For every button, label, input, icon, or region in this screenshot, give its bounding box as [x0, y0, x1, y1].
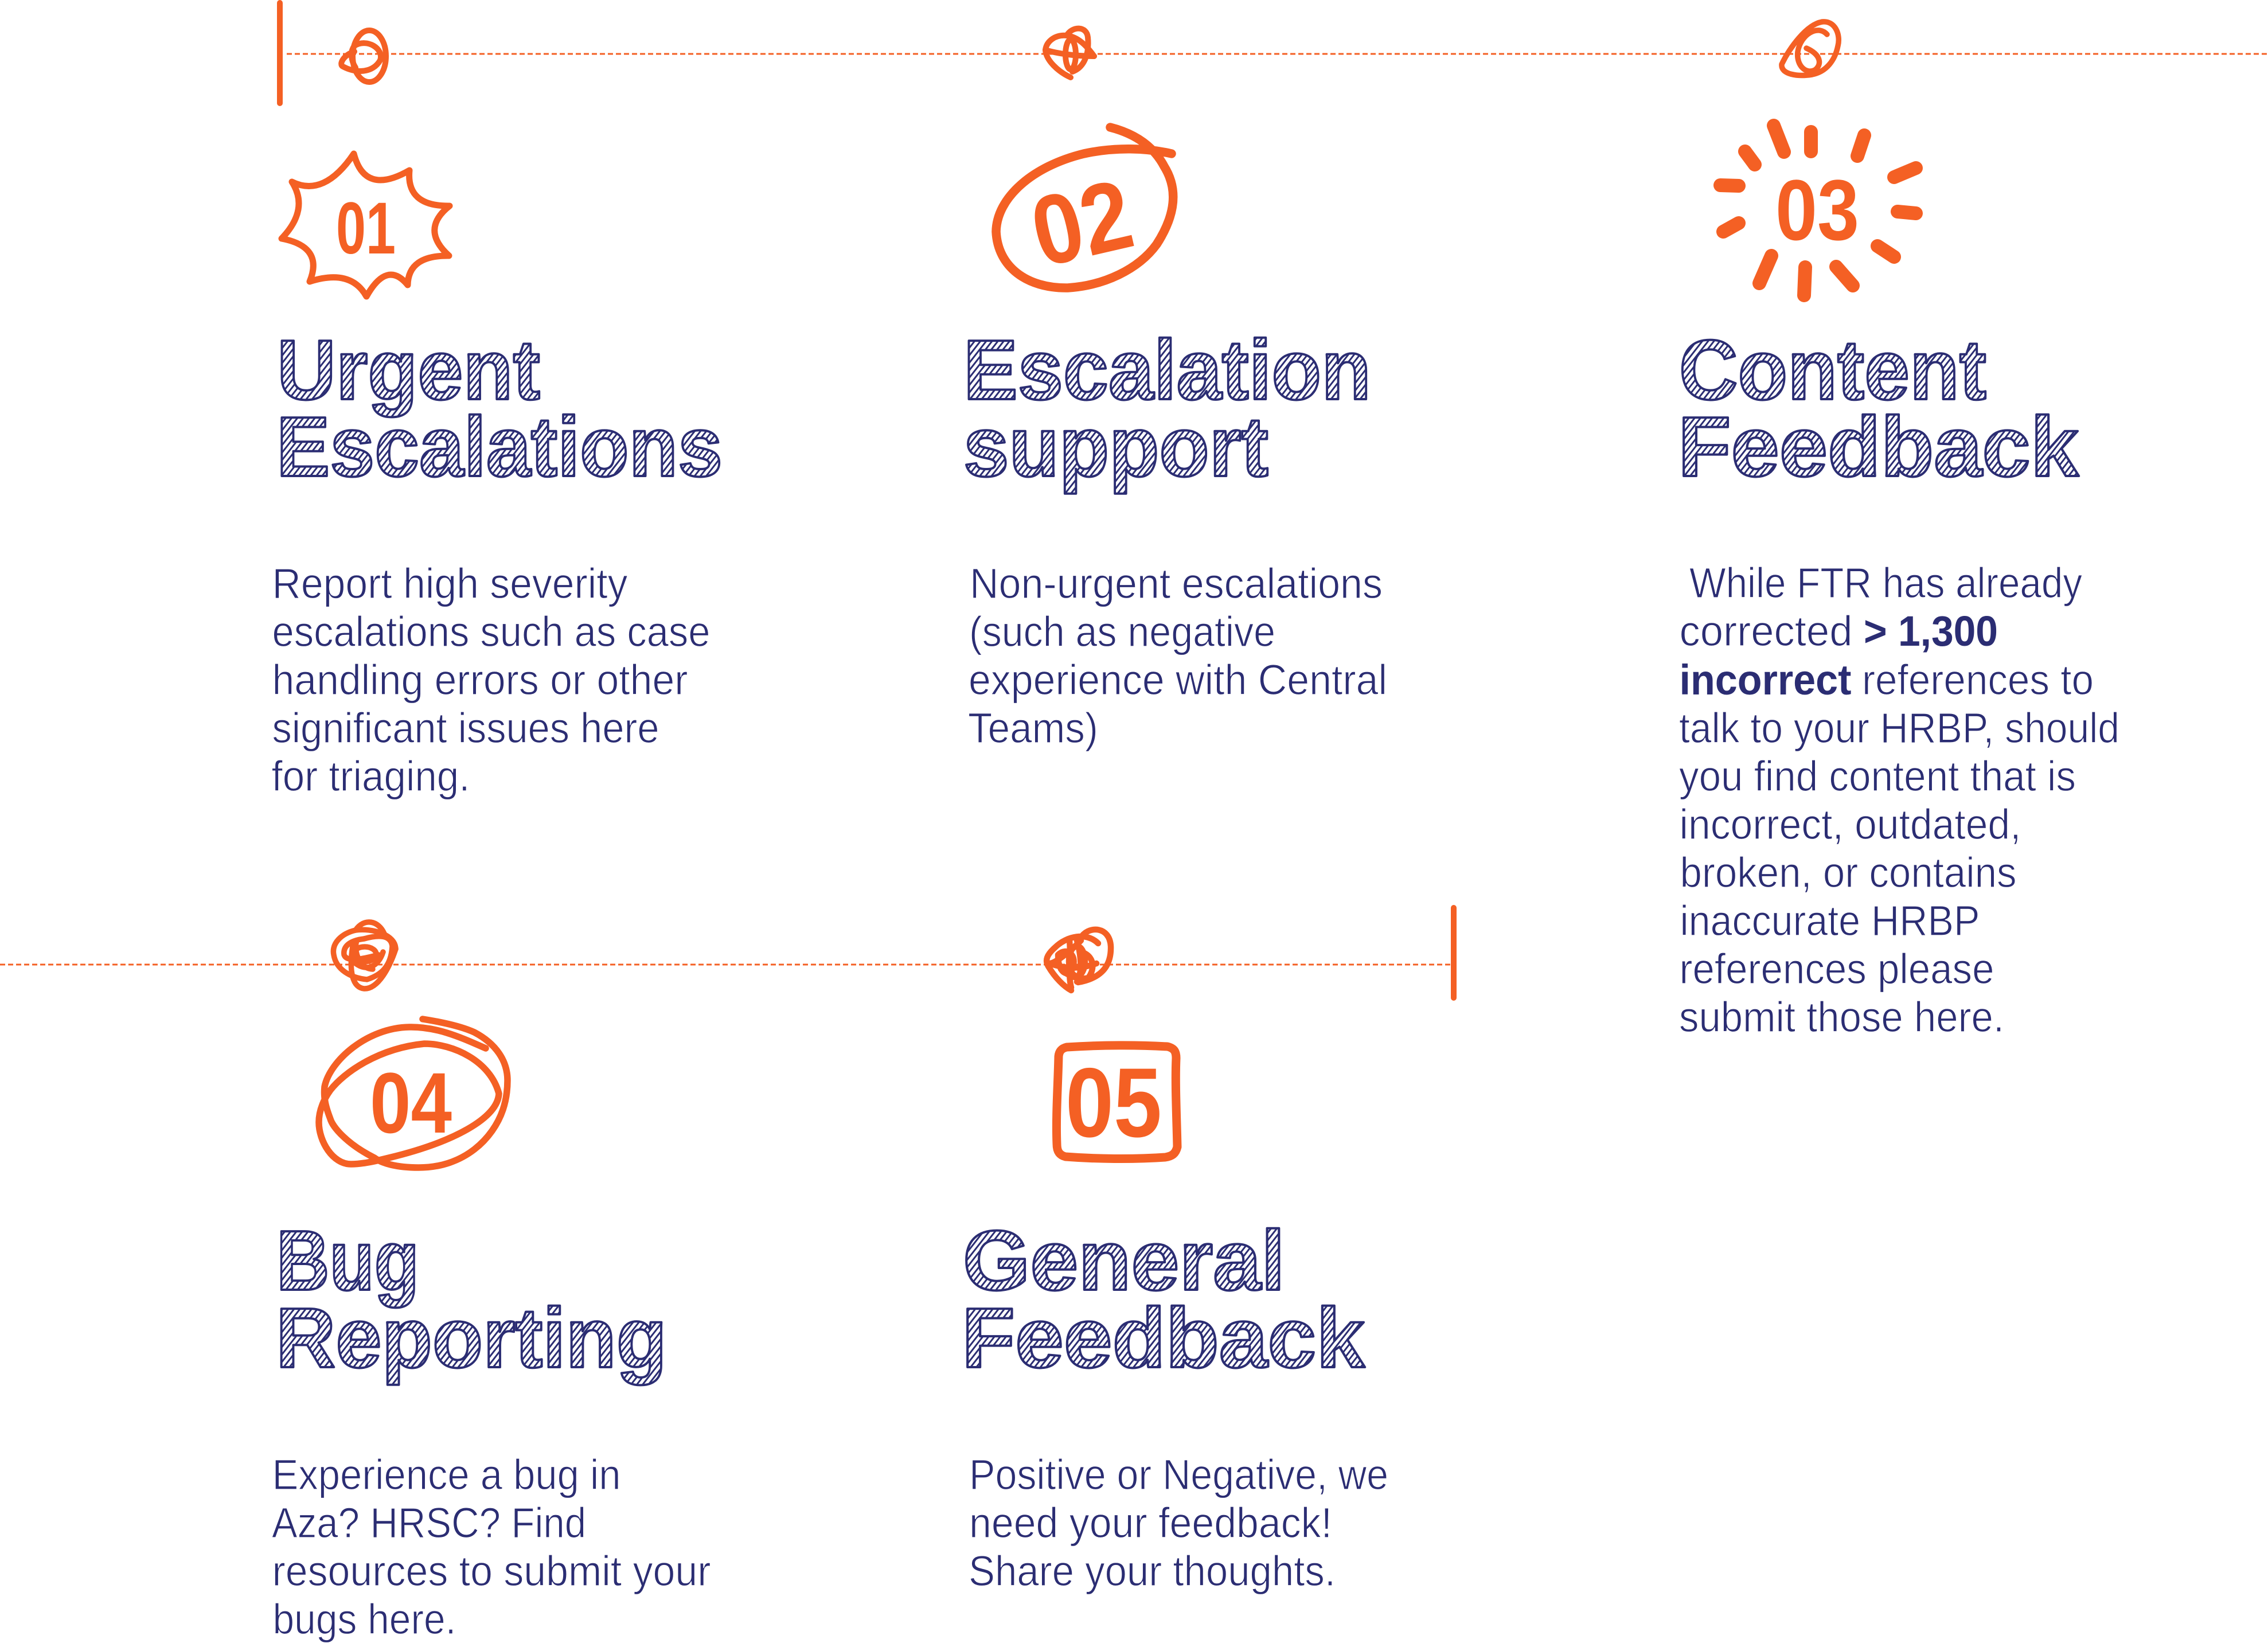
heading: bug reporting: Bug — [276, 1213, 419, 1308]
icon: double-circled badge 04 — [319, 1019, 508, 1168]
heading: escalation support — [963, 323, 1371, 494]
text block: content feedback description: broken, or contains — [1680, 849, 2016, 896]
text block: content feedback description: > 1,300 — [1864, 607, 1998, 655]
icon: timeline scribble 3 — [1782, 22, 1838, 75]
text block: content feedback description: corrected — [1679, 607, 1852, 655]
icon: circled badge 02: 02 — [1021, 158, 1142, 288]
heading: general feedback — [962, 1213, 1365, 1385]
text block: content feedback description — [1679, 559, 2119, 1041]
icon: circled badge 02 — [996, 127, 1173, 288]
text block: general feedback description — [969, 1451, 1388, 1595]
panel: urgent escalations — [272, 30, 723, 800]
text block: escalation support description: (such as negative — [969, 608, 1275, 655]
text block: escalation support description: experience with Central — [969, 656, 1387, 704]
heading: bug reporting — [276, 1213, 667, 1385]
timeline: bottom row — [0, 905, 1457, 1001]
text block: escalation support description: Teams) — [968, 704, 1098, 752]
icon: burst badge 01: 01 — [336, 188, 396, 270]
heading: general feedback: General — [963, 1213, 1285, 1308]
text block: content feedback description: talk to your HRBP, should — [1679, 704, 2119, 752]
heading: urgent escalations — [276, 323, 723, 494]
text block: bug reporting description: Experience a bug in — [272, 1451, 620, 1498]
text block: content feedback description: you find content that is — [1679, 752, 2076, 800]
heading: bug reporting: Reporting — [276, 1291, 667, 1385]
heading: content feedback — [1678, 323, 2079, 494]
text block: escalation support description — [968, 560, 1387, 752]
panel: bug reporting — [272, 922, 711, 1643]
text block: urgent escalations description: significant issues here — [272, 704, 659, 752]
heading: escalation support: Escalation — [963, 323, 1371, 417]
icon: timeline scribble 1 — [341, 30, 386, 82]
text block: general feedback description: need your feedback! — [969, 1499, 1332, 1547]
timeline: top row — [277, 0, 2268, 106]
text block: general feedback description: Share your thoughts. — [969, 1547, 1336, 1595]
text block: escalation support description: Non-urgent escalations — [970, 560, 1383, 607]
panel: general feedback — [962, 930, 1388, 1595]
icon: sunburst badge 03: 03 — [1775, 162, 1859, 258]
icon: square badge 05: 05 — [1065, 1048, 1162, 1158]
text block: urgent escalations description: Report high severity — [272, 560, 627, 607]
text block: urgent escalations description — [272, 560, 710, 800]
text block: bug reporting description: Aza? HRSC? Find — [272, 1499, 586, 1547]
text block: content feedback description: references please — [1679, 945, 1994, 993]
icon: sunburst badge 03 — [1720, 126, 1916, 295]
text block: urgent escalations description: escalations such as case — [272, 608, 710, 655]
icon: timeline scribble 5 — [1047, 930, 1111, 990]
text block: content feedback description: inaccurate HRBP — [1680, 897, 1980, 945]
heading: general feedback: Feedback — [962, 1291, 1365, 1385]
heading: content feedback: Content — [1679, 323, 1986, 417]
icon: double-circled badge 04: 04 — [370, 1055, 452, 1151]
text block: content feedback description: incorrect, outdated, — [1679, 801, 2021, 848]
panel: content feedback — [1678, 22, 2119, 1041]
text block: content feedback description: incorrect — [1679, 656, 1851, 704]
icon: timeline scribble 2 — [1045, 29, 1094, 77]
heading: escalation support: support — [963, 400, 1268, 494]
text block: content feedback description: references to — [1862, 656, 2094, 704]
icon: burst badge 01 — [282, 154, 450, 296]
text block: bug reporting description — [272, 1451, 711, 1643]
text block: content feedback description: submit those here. — [1679, 993, 2004, 1041]
text block: urgent escalations description: for triaging. — [272, 752, 470, 800]
heading: content feedback: Feedback — [1678, 400, 2079, 494]
text block: general feedback description: Positive or Negative, we — [969, 1451, 1388, 1498]
text block: content feedback description: While FTR has already — [1689, 559, 2082, 607]
text block: bug reporting description: bugs here. — [273, 1595, 456, 1643]
panel: escalation support — [963, 29, 1387, 752]
heading: urgent escalations: Urgent — [277, 323, 540, 417]
text block: bug reporting description: resources to submit your — [272, 1547, 711, 1595]
text block: urgent escalations description: handling errors or other — [272, 656, 688, 704]
heading: urgent escalations: Escalations — [276, 400, 723, 494]
icon: timeline scribble 4 — [333, 922, 396, 989]
